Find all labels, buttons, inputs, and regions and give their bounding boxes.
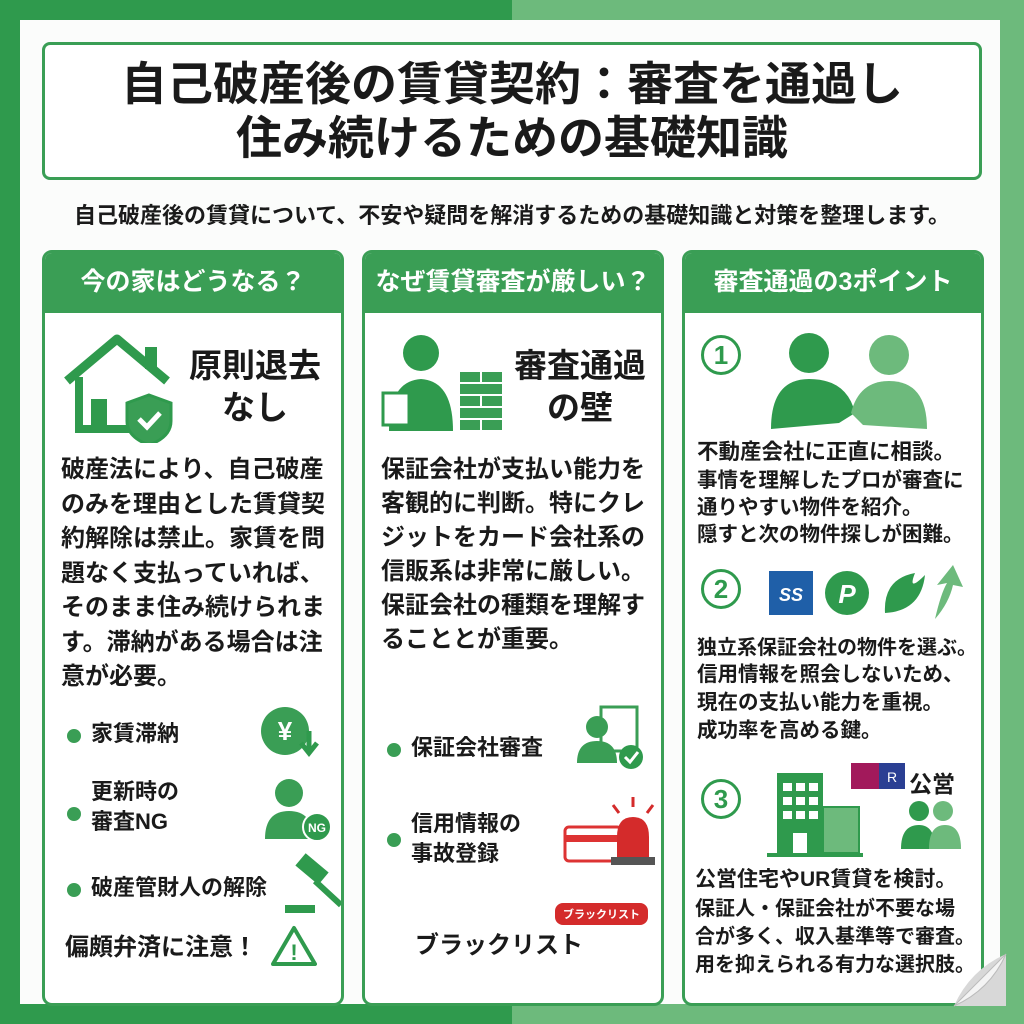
icon: yen down bbox=[261, 707, 319, 757]
heading: current home: 今の家はどうなる？ bbox=[80, 268, 306, 296]
point 3: 保証人・保証会社が不要な場 bbox=[695, 898, 955, 920]
page curl bbox=[954, 954, 1006, 1006]
text block: 保証会社が支払い能力を客観的に判断。特にクレジットをカード会社系の信販系は非常に厳しい。保証会社の種類を理解することとが重要。 bbox=[381, 456, 645, 653]
panel: current home bbox=[42, 250, 344, 1006]
point 3: 公営 bbox=[909, 771, 955, 797]
icon: handshake bbox=[771, 333, 927, 429]
heading: wall: 審査通過 bbox=[514, 347, 646, 384]
heading: なぜ賃貸審査が厳しい？ bbox=[375, 268, 650, 296]
list: screening bbox=[387, 706, 655, 866]
list: risks: 家賃滞納 bbox=[91, 721, 179, 746]
icon: guarantor company logos bbox=[769, 565, 963, 619]
point 3: 3 bbox=[714, 784, 728, 814]
heading: wall: の壁 bbox=[547, 389, 613, 426]
icon: document person check bbox=[577, 706, 643, 769]
point 3: 公営住宅やUR賃貸を検討。 bbox=[695, 868, 956, 891]
icon: yen down: ¥ bbox=[278, 716, 293, 746]
point 1: 事情を理解したプロが審査に bbox=[697, 469, 964, 492]
heading: no eviction: 原則退去 bbox=[189, 347, 321, 384]
point 1: 通りやすい物件を紹介。 bbox=[697, 496, 922, 519]
panel: 3 points bbox=[682, 250, 984, 1006]
point 1: 1 bbox=[714, 340, 728, 370]
icon: gavel bbox=[285, 853, 341, 913]
heading: current home bbox=[45, 253, 341, 313]
icon: guarantor company logos: SS bbox=[779, 585, 803, 605]
warning bbox=[65, 926, 317, 966]
point 2: 2 bbox=[714, 574, 728, 604]
point 2: 現在の支払い能力を重視。 bbox=[697, 691, 943, 714]
point 2: 信用情報を照会しないため、 bbox=[697, 663, 964, 686]
title: 自己破産後の賃貸契約：審査を通過し bbox=[121, 58, 903, 110]
icon: buildings, UR, people bbox=[767, 763, 961, 857]
list: screening: 保証会社審査 bbox=[411, 735, 543, 760]
blacklist label: ブラックリスト bbox=[563, 909, 640, 921]
warning: 偏頗弁済に注意！ bbox=[65, 934, 257, 961]
heading bbox=[365, 253, 661, 313]
icon: person NG bbox=[265, 779, 330, 840]
point 1 bbox=[697, 333, 964, 546]
point 1: 隠すと次の物件探しが困難。 bbox=[697, 523, 964, 546]
heading: 審査通過の3ポイント bbox=[714, 268, 952, 296]
icon: buildings, UR, people: R bbox=[887, 769, 897, 785]
point 2 bbox=[697, 565, 977, 742]
list: risks: 更新時の bbox=[91, 779, 179, 804]
list: risks: 審査NG bbox=[91, 809, 168, 834]
heading: no eviction bbox=[189, 347, 321, 426]
heading: no eviction: なし bbox=[222, 389, 288, 426]
point 2: 独立系保証会社の物件を選ぶ。 bbox=[697, 637, 977, 659]
list: risks: 破産管財人の解除 bbox=[91, 875, 267, 900]
list: screening: 信用情報の bbox=[411, 811, 521, 836]
panel: strict screening bbox=[362, 250, 664, 1006]
icon: card and siren bbox=[564, 797, 655, 865]
icon: guarantor company logos: P bbox=[838, 579, 856, 609]
point 3: 合が多く、収入基準等で審査。 bbox=[695, 926, 975, 948]
icon: warning triangle: ! bbox=[290, 940, 298, 965]
icon: person NG: NG bbox=[308, 821, 326, 835]
title: 住み続けるための基礎知識 bbox=[236, 112, 788, 164]
icon: person and wall bbox=[382, 335, 502, 431]
list: screening: 事故登録 bbox=[411, 841, 499, 866]
point 1: 不動産会社に正直に相談。 bbox=[697, 440, 955, 464]
heading: wall bbox=[514, 347, 646, 426]
title bbox=[42, 42, 982, 180]
blacklist label: ブラックリスト bbox=[415, 932, 583, 959]
blacklist label bbox=[415, 903, 648, 959]
point 3: 用を抑えられる有力な選択肢。 bbox=[695, 954, 975, 976]
subtitle: 自己破産後の賃貸について、不安や疑問を解消するための基礎知識と対策を整理します。 bbox=[74, 203, 950, 228]
point 3 bbox=[695, 763, 975, 976]
icon: warning triangle bbox=[271, 926, 317, 966]
text block: 破産法により、自己破産のみを理由とした賃貸契約解除は禁止。家賃を問題なく支払っていれば、そのまま住み続けられます。滞納がある場合は注意が必要。 bbox=[61, 456, 325, 690]
list: risks bbox=[67, 707, 341, 913]
point 2: 成功率を高める鍵。 bbox=[697, 719, 882, 742]
icon: house with shield bbox=[64, 334, 172, 443]
heading bbox=[685, 253, 981, 313]
